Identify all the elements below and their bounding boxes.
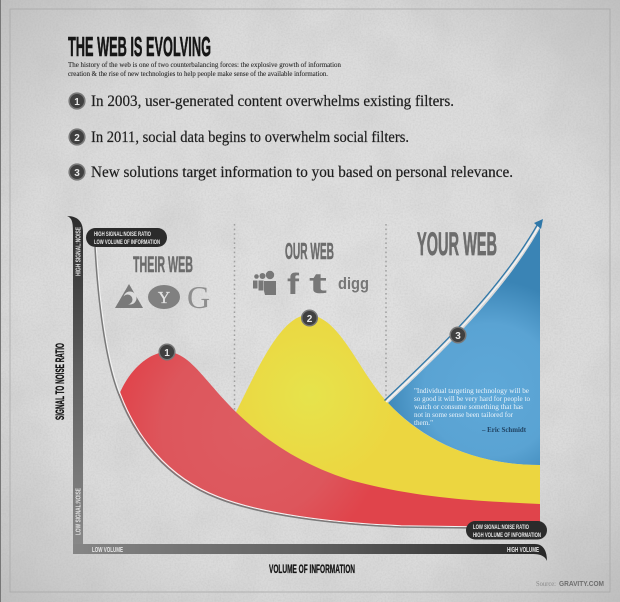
marker 3 <box>450 327 466 343</box>
quote callout: "Individual targeting technology will be <box>414 386 530 395</box>
source credit: Source: <box>536 579 556 588</box>
quote callout: not in some sense been tailored for <box>414 410 514 419</box>
baseline curve <box>95 246 473 528</box>
numbered point 3: New solutions target information to you based on personal relevance. <box>91 164 513 181</box>
icon: Digg: digg <box>338 274 369 293</box>
text: THE WEB IS EVOLVING <box>68 31 211 62</box>
quote callout: them." <box>414 418 433 427</box>
pill: low signal high volume <box>466 521 547 540</box>
intro text: creation & the rise of new technologies to help people make sense of the available information. <box>68 69 328 78</box>
icon: Facebook: f <box>287 268 300 301</box>
quote callout: – Eric Schmidt <box>481 425 526 434</box>
icon: Google: G <box>187 279 210 315</box>
source credit: GRAVITY.COM <box>559 579 604 588</box>
x axis label: high: HIGH VOLUME <box>507 545 539 554</box>
marker 1 <box>159 344 175 360</box>
marker 1: 1 <box>164 348 170 359</box>
pill: high signal low volume: LOW VOLUME OF INFORMATION <box>94 239 160 246</box>
numbered point 2: 2 <box>74 133 80 144</box>
icon: MySpace <box>253 271 276 295</box>
icon: AOL <box>115 284 143 308</box>
intro text <box>68 60 341 78</box>
y axis title: SIGNAL TO NOISE RATIO <box>53 343 67 420</box>
chart: signal to noise curves <box>95 219 543 528</box>
numbered point 3: 3 <box>74 168 80 179</box>
marker 3: 3 <box>455 331 461 342</box>
marker 2: 2 <box>307 314 313 325</box>
pill: high signal low volume: HIGH SIGNAL:NOISE RATIO <box>94 231 151 238</box>
icon: Yahoo: Y <box>158 288 170 307</box>
x axis label: low: LOW VOLUME <box>92 545 123 554</box>
x axis <box>73 544 547 561</box>
y axis label: high: HIGH SIGNAL:NOISE <box>74 227 82 276</box>
y axis label: low: LOW SIGNAL:NOISE <box>74 488 82 535</box>
text: THEIR WEB <box>133 252 193 277</box>
intro text: The history of the web is one of two counterbalancing forces: the explosive growth of information <box>68 60 341 69</box>
pill: low signal high volume: HIGH VOLUME OF INFORMATION <box>473 532 541 539</box>
y axis <box>67 216 83 554</box>
numbered point 2: In 2011, social data begins to overwhelm social filters. <box>91 129 409 146</box>
marker 2 <box>302 310 317 326</box>
source credit <box>536 579 604 588</box>
arrow: growth of your web <box>384 219 543 402</box>
icon: Twitter: t <box>309 268 328 300</box>
icon: Yahoo <box>148 285 180 309</box>
era dividers <box>234 224 386 412</box>
text: OUR WEB <box>285 238 334 264</box>
numbered point 1: In 2003, user-generated content overwhelms existing filters. <box>91 93 454 110</box>
area: yellow our web <box>236 315 540 504</box>
quote callout: watch or consume something that has <box>414 402 523 411</box>
pill: low signal high volume: LOW SIGNAL:NOISE RATIO <box>473 524 529 531</box>
x axis title: VOLUME OF INFORMATION <box>269 562 355 576</box>
area: red their web <box>119 352 540 528</box>
numbered point 1: 1 <box>74 97 80 108</box>
quote callout: so good it will be very hard for people to <box>414 394 530 403</box>
pill: high signal low volume <box>86 228 167 247</box>
area: blue your web <box>388 228 540 465</box>
quote callout <box>414 386 530 434</box>
text: YOUR WEB <box>417 226 497 262</box>
